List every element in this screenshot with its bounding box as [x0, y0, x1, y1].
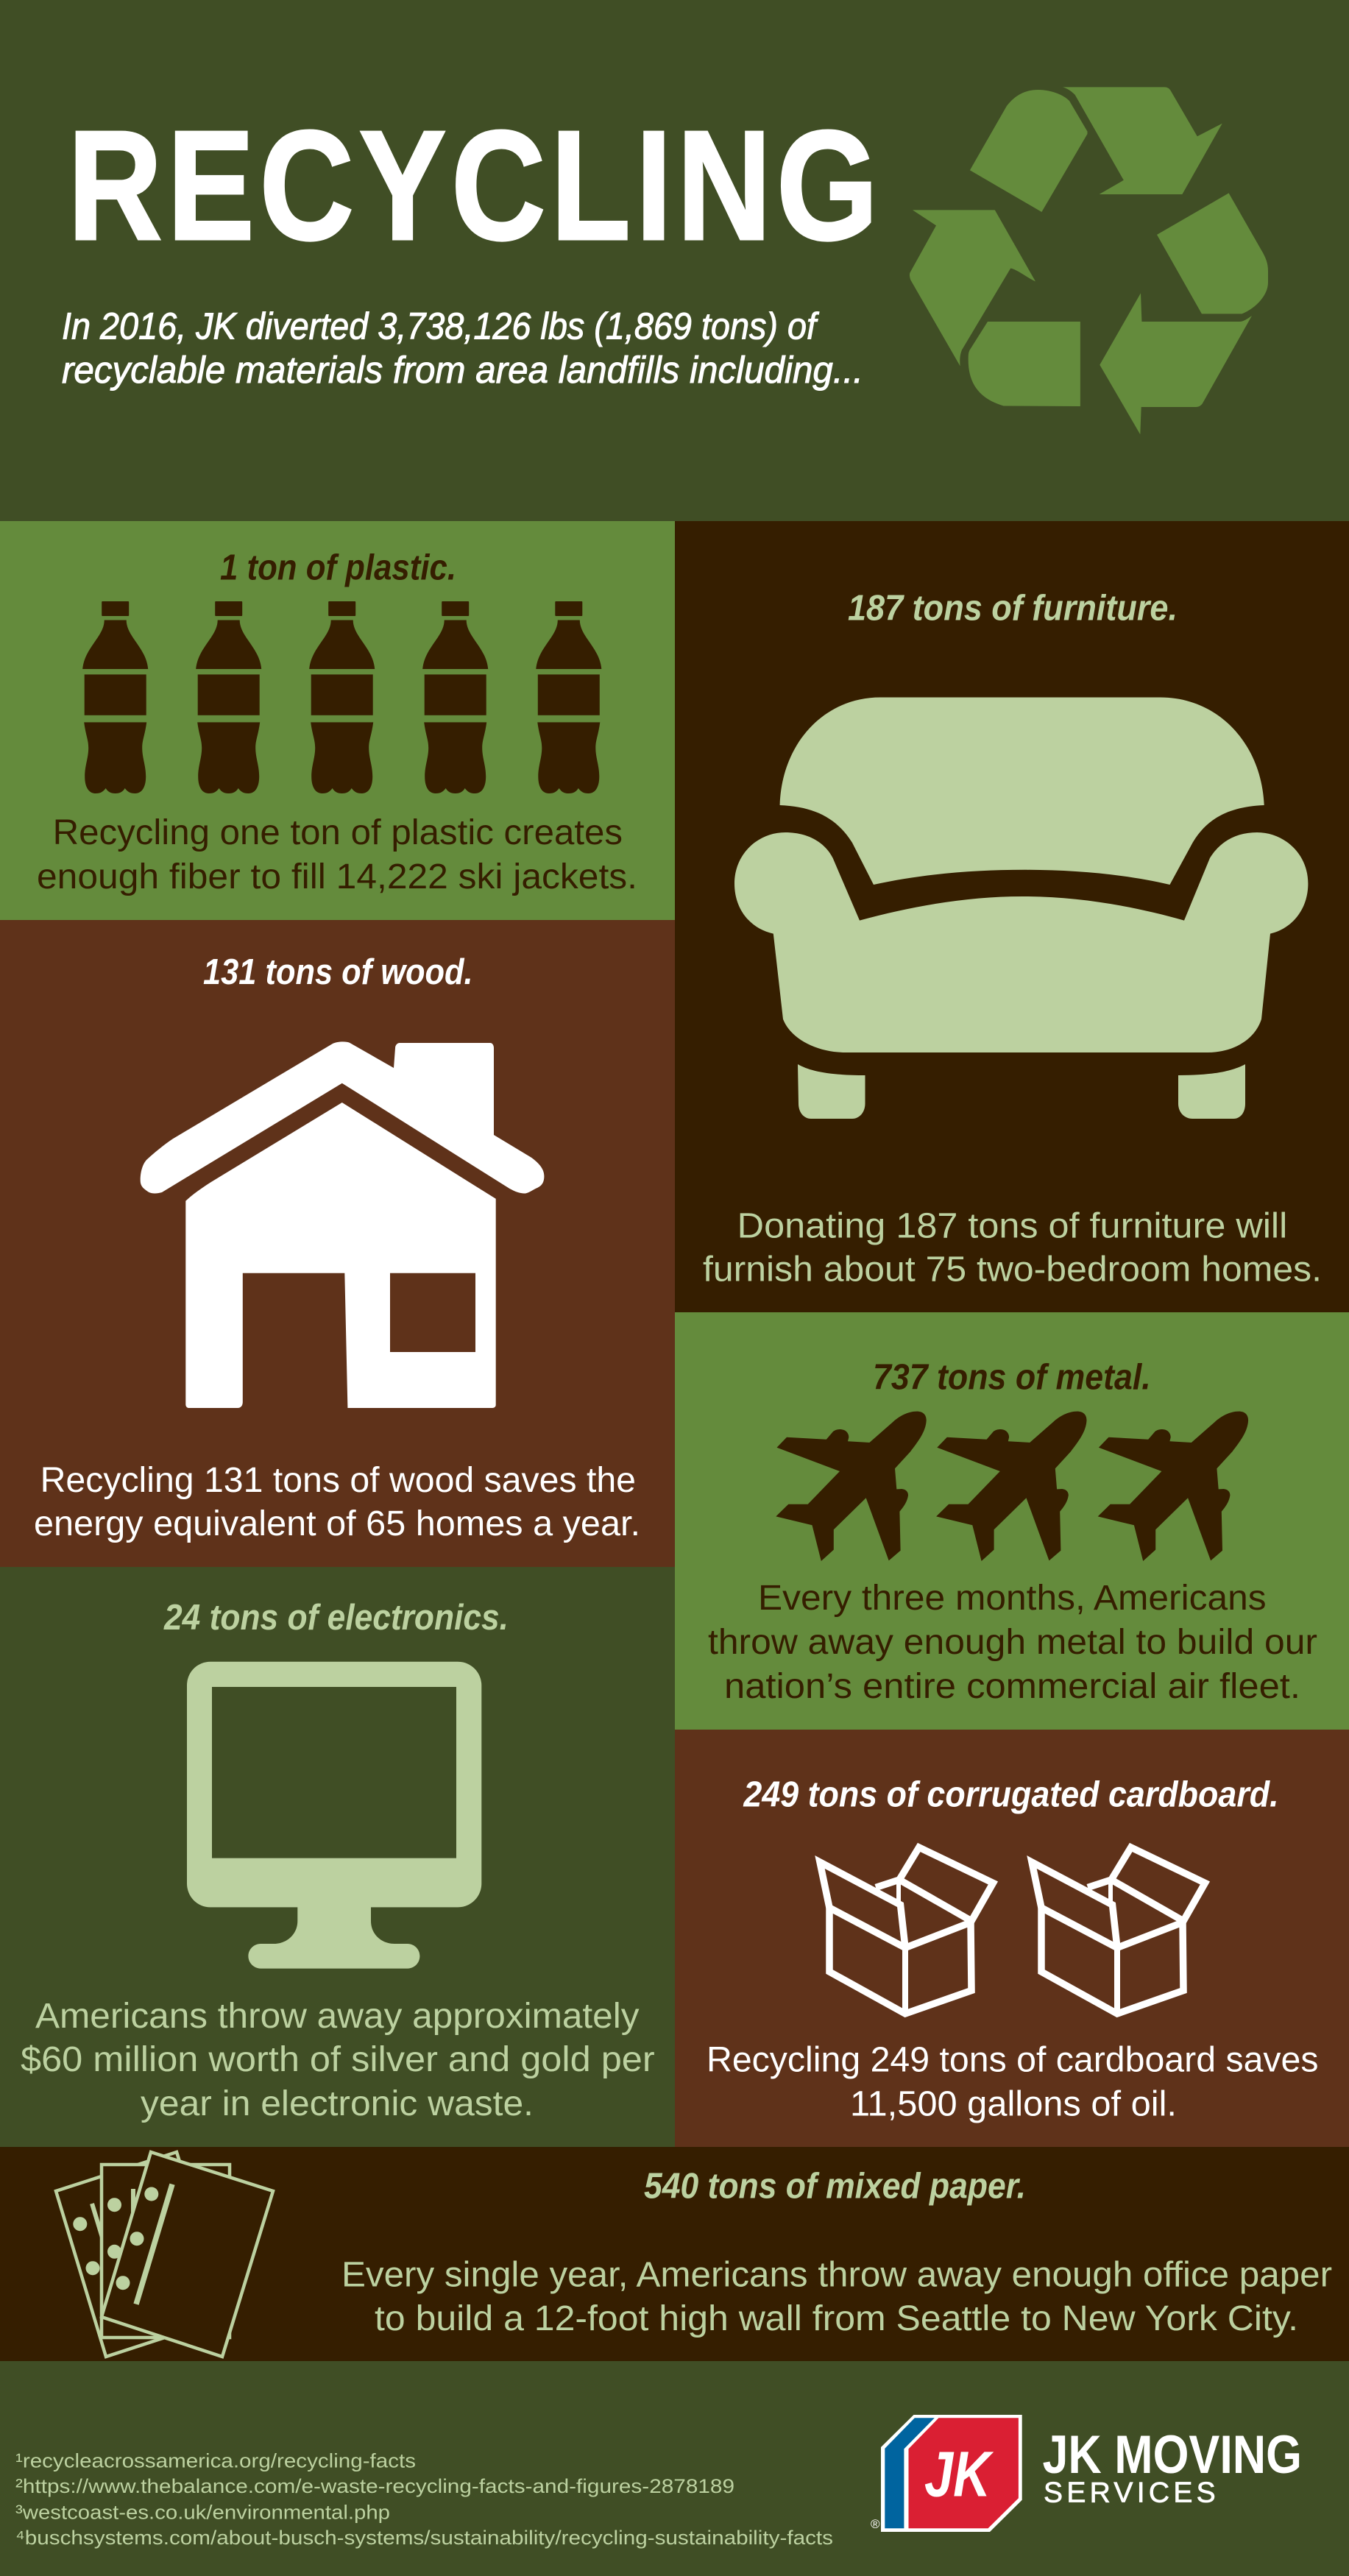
text: electronics fact — [21, 1997, 655, 2123]
heading: metal: 737 tons of metal. — [873, 1357, 1151, 1397]
icon: three airplanes — [776, 1412, 1248, 1561]
heading: mixed paper: 540 tons of mixed paper. — [644, 2167, 1026, 2207]
panel: cardboard — [675, 1730, 1349, 2147]
text: cardboard fact: 11,500 gallons of oil. — [850, 2084, 1177, 2123]
text: paper fact — [341, 2256, 1332, 2338]
panel: electronics — [0, 1567, 675, 2147]
intro text: In 2016, JK diverted 3,738,126 lbs (1,869 tons) of — [62, 305, 819, 347]
panel: metal — [675, 1312, 1349, 1730]
text: wood fact: energy equivalent of 65 homes a year. — [34, 1504, 640, 1543]
icon: recycling symbol — [910, 87, 1268, 434]
text: plastic fact: Recycling one ton of plastic creates — [53, 813, 623, 852]
footer: source references: ⁴buschsystems.com/about-busch-systems/sustainability/recycling-sustainability-facts — [15, 2527, 833, 2549]
intro text — [62, 305, 863, 391]
text: cardboard fact — [707, 2040, 1319, 2123]
text: plastic fact — [37, 813, 637, 896]
footer: source references — [15, 2450, 833, 2549]
panel: wood — [0, 920, 675, 1567]
icon: computer monitor — [187, 1662, 481, 1969]
panel: mixed paper — [0, 2147, 1349, 2361]
icon: house — [141, 1041, 544, 1408]
heading: wood: 131 tons of wood. — [203, 952, 473, 992]
title: RECYCLING — [68, 98, 883, 272]
text: metal fact: Every three months, Americans — [758, 1579, 1267, 1618]
text: furniture fact: furnish about 75 two-bedroom homes. — [703, 1250, 1322, 1289]
panel: plastic — [0, 521, 675, 920]
logo tagline: SERVICES — [1044, 2477, 1216, 2508]
footer: source references: ²https://www.thebalance.com/e-waste-recycling-facts-and-figures-2878189 — [15, 2475, 734, 2497]
text: paper fact: to build a 12-foot high wall from Seattle to New York City. — [375, 2299, 1298, 2338]
logo mark: ® — [871, 2517, 880, 2531]
text: metal fact: throw away enough metal to build our — [708, 1623, 1317, 1662]
text: metal fact — [708, 1579, 1317, 1706]
heading: furniture: 187 tons of furniture. — [848, 589, 1178, 629]
text: electronics fact: $60 million worth of silver and gold per — [21, 2040, 655, 2079]
text: electronics fact: year in electronic waste. — [141, 2084, 534, 2123]
text: wood fact — [34, 1461, 640, 1543]
text: electronics fact: Americans throw away approximately — [35, 1997, 639, 2036]
text: plastic fact: enough fiber to fill 14,222 ski jackets. — [37, 857, 637, 896]
icon: five bottles — [82, 601, 601, 793]
intro text: recyclable materials from area landfills including... — [62, 349, 863, 391]
icon: sofa — [734, 698, 1308, 1119]
heading: cardboard: 249 tons of corrugated cardboard. — [743, 1775, 1279, 1815]
footer: source references: ¹recycleacrossamerica.org/recycling-facts — [15, 2450, 416, 2472]
logo: JK Moving Services — [871, 2415, 1302, 2532]
panel: furniture — [675, 521, 1349, 1312]
logo wordmark: JK MOVING — [1042, 2425, 1302, 2485]
heading: electronics: 24 tons of electronics. — [163, 1598, 509, 1638]
icon: stack of paper sheets — [56, 2152, 273, 2357]
text: paper fact: Every single year, Americans throw away enough office paper — [341, 2256, 1332, 2295]
logo mark — [871, 2415, 1022, 2532]
text: furniture fact — [703, 1207, 1322, 1289]
icon: two open boxes — [820, 1847, 1205, 2014]
logo mark: JK — [924, 2439, 994, 2510]
text: wood fact: Recycling 131 tons of wood saves the — [40, 1461, 636, 1500]
heading: plastic: 1 ton of plastic. — [220, 548, 456, 587]
footer: source references: ³westcoast-es.co.uk/environmental.php — [15, 2502, 390, 2524]
text: furniture fact: Donating 187 tons of furniture will — [737, 1207, 1287, 1246]
text: metal fact: nation’s entire commercial air fleet. — [724, 1667, 1300, 1706]
text: cardboard fact: Recycling 249 tons of cardboard saves — [707, 2040, 1319, 2079]
